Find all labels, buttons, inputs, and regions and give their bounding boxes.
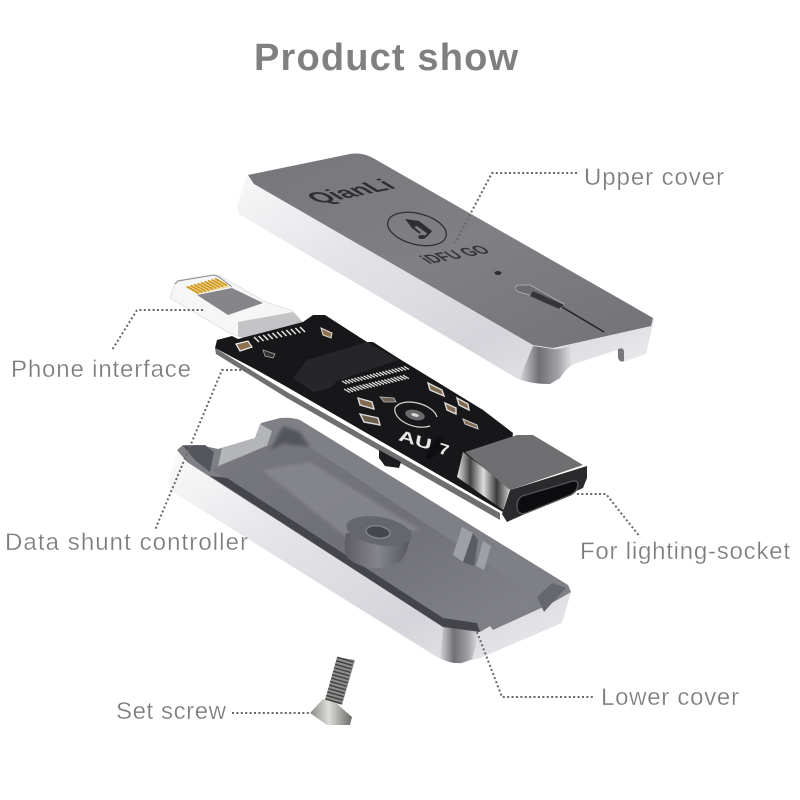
label: upper cover: Upper cover bbox=[584, 164, 724, 191]
board edge tab bbox=[379, 450, 401, 468]
socket metal barrel bbox=[457, 452, 510, 510]
label: set screw: Set screw bbox=[116, 698, 227, 725]
upper cover silver body bbox=[237, 154, 654, 384]
socket front bezel bbox=[502, 466, 587, 522]
lightning plug bbox=[170, 275, 303, 339]
small components bbox=[236, 328, 478, 429]
lower cover inner dark wall bbox=[210, 476, 480, 632]
leader: lower cover bbox=[477, 632, 593, 697]
upper cover bbox=[237, 154, 654, 384]
black capacitor over marking bbox=[425, 436, 445, 460]
board marking text: AU bbox=[397, 426, 433, 454]
board logo ring bbox=[395, 402, 437, 427]
slide switch bbox=[515, 285, 604, 332]
lower cover bbox=[168, 418, 571, 663]
lower cover silver outer face bbox=[168, 450, 571, 663]
board side edge bbox=[215, 348, 500, 520]
lower cover floor bbox=[212, 444, 537, 623]
standoff post bbox=[344, 511, 414, 568]
label: lower cover: Lower cover bbox=[601, 684, 739, 711]
connector pins bbox=[254, 327, 305, 342]
upper cover top face bbox=[248, 154, 653, 348]
socket top face bbox=[465, 435, 583, 490]
gold contacts bbox=[185, 279, 230, 294]
label: phone interface: Phone interface bbox=[11, 356, 191, 383]
upper cover notch screw hole bbox=[618, 348, 624, 362]
ribs bbox=[453, 527, 491, 570]
chip pins bbox=[342, 366, 409, 392]
title: Product show bbox=[254, 37, 518, 79]
lower cover corner shading bbox=[440, 627, 480, 663]
leader: data shunt controller bbox=[155, 370, 250, 530]
leader: upper cover bbox=[455, 173, 577, 243]
label: data shunt controller: Data shunt controller bbox=[5, 529, 248, 556]
leader: for lighting-socket bbox=[577, 494, 640, 537]
back wall shadow bbox=[270, 426, 310, 450]
screw head bbox=[310, 699, 352, 725]
leader: phone interface bbox=[112, 310, 203, 350]
lower cover rim and walls bbox=[177, 418, 571, 632]
main chip bbox=[293, 342, 398, 392]
black PCB bbox=[215, 315, 513, 512]
board marking seven: 7 bbox=[437, 439, 451, 460]
screw shank bbox=[325, 657, 355, 705]
leader: set screw bbox=[232, 712, 310, 714]
brand text: QianLi bbox=[300, 177, 403, 207]
label: for lighting-socket: For lighting-socket bbox=[580, 538, 790, 565]
indicator hole bbox=[494, 271, 502, 275]
screw bbox=[310, 657, 355, 725]
circuit board bbox=[170, 275, 587, 522]
right corner detail bbox=[537, 583, 566, 612]
screw thread bbox=[333, 659, 346, 703]
product name text: iDFU GO bbox=[415, 243, 496, 267]
music icon bbox=[384, 207, 450, 251]
silver notch bbox=[218, 424, 272, 466]
floor highlight bbox=[262, 462, 420, 540]
upper cover corner shading bbox=[520, 346, 574, 384]
socket opening bbox=[517, 481, 578, 514]
left corner detail bbox=[183, 445, 214, 472]
